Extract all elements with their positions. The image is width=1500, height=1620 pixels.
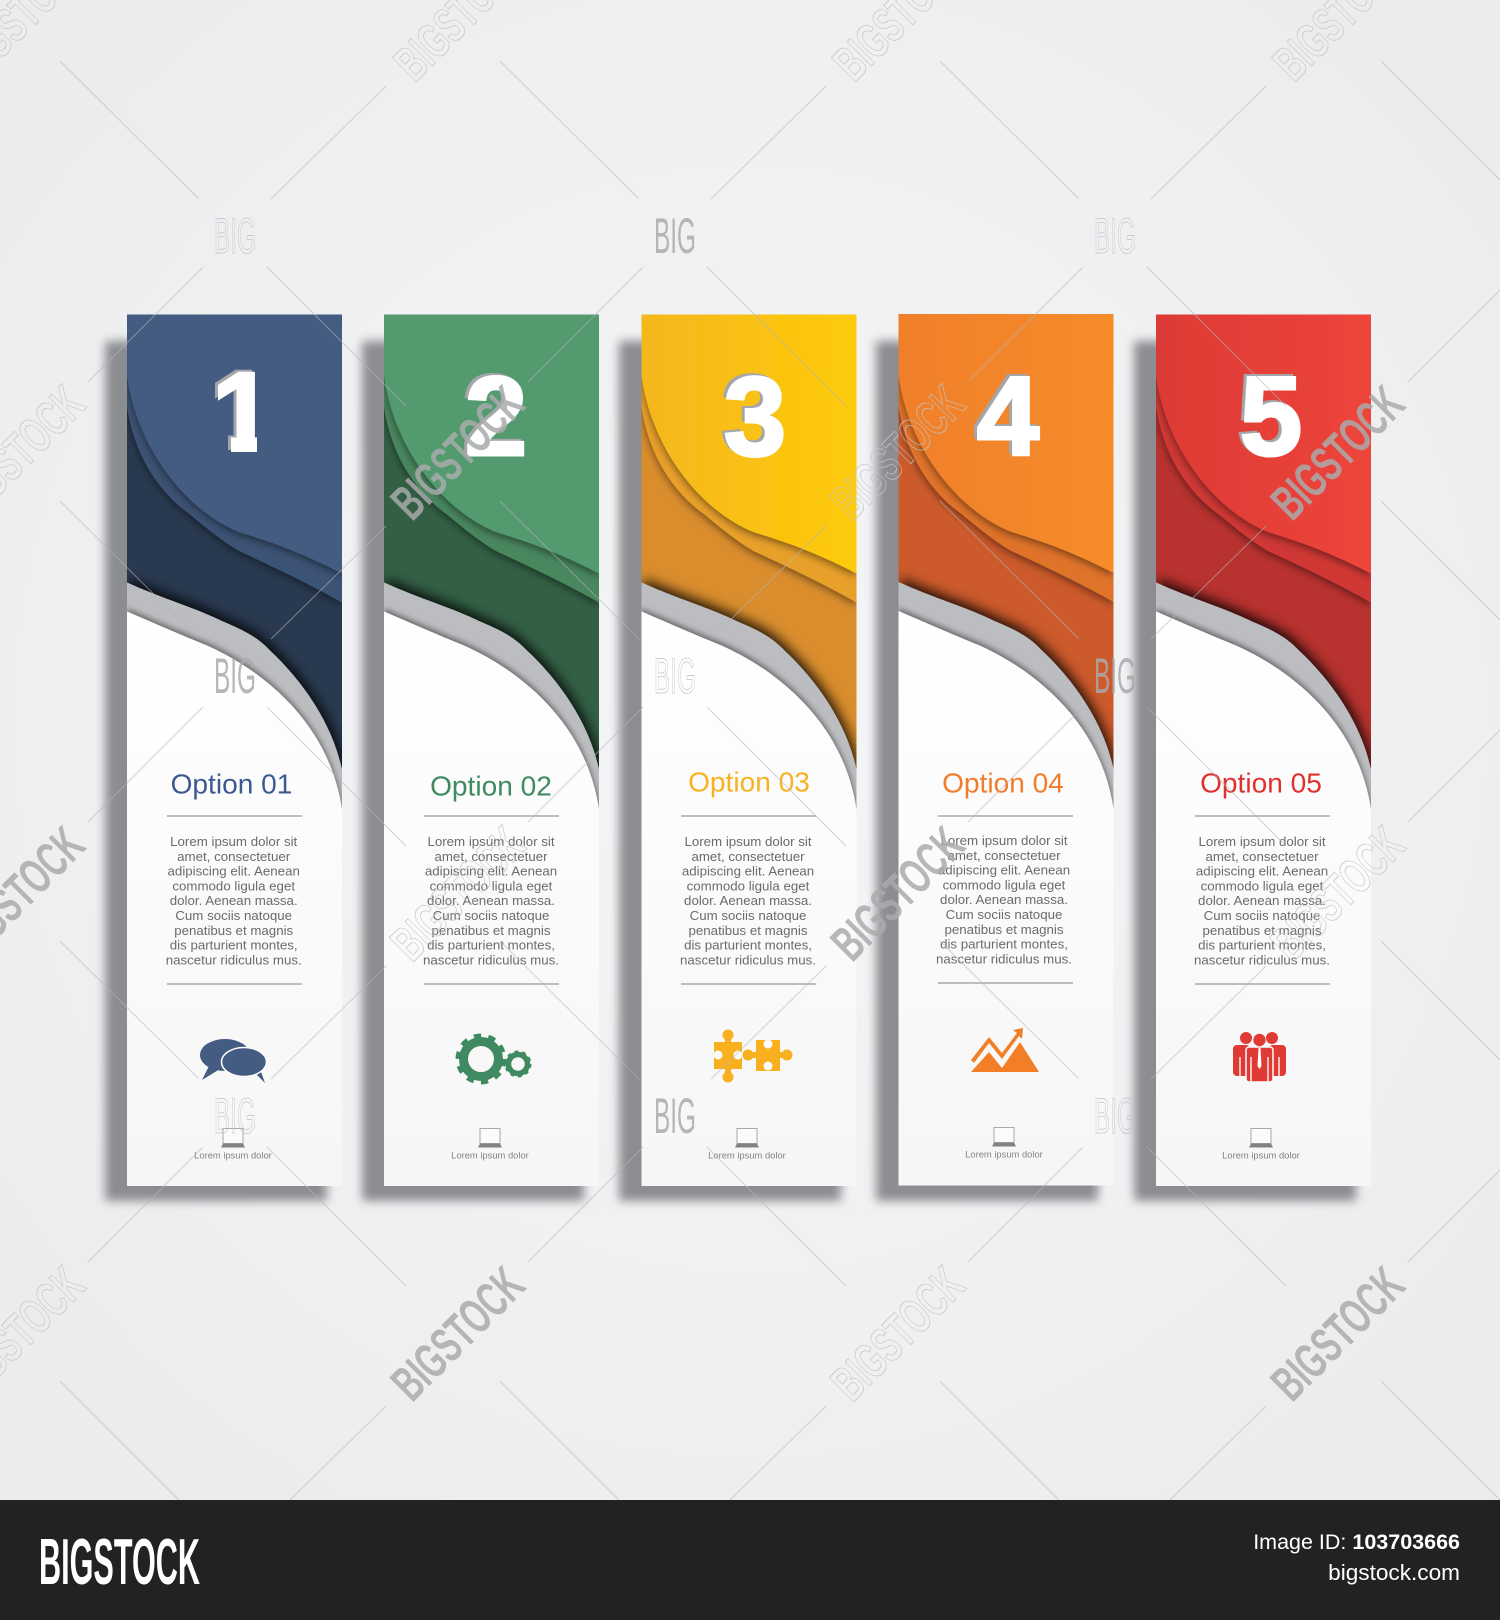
- text block 2: adipiscing elit. Aenean: [425, 864, 557, 879]
- icon: laptop: [1249, 1128, 1273, 1148]
- icon: team of people: [1233, 1032, 1286, 1082]
- watermark: BIG: BIG: [214, 208, 256, 264]
- icon: puzzle pieces: [714, 1030, 792, 1082]
- panel: option 5: [1156, 314, 1371, 1186]
- icon: laptop: [221, 1128, 245, 1148]
- text block 4: Lorem ipsum dolor sit: [940, 833, 1068, 848]
- text block 2: commodo ligula eget: [430, 878, 553, 893]
- card layers 1: [127, 314, 342, 1186]
- card layers 5: [1156, 314, 1371, 1186]
- card layers 2: [384, 314, 599, 1186]
- text block 5: penatibus et magnis: [1202, 923, 1322, 938]
- divider bottom: [167, 983, 302, 985]
- watermark: BIG: BIG: [654, 208, 696, 264]
- icon: gears: [458, 1036, 530, 1082]
- heading: Option 03: Option 03: [688, 766, 810, 798]
- divider bottom: [938, 982, 1073, 984]
- text block 4: dis parturient montes,: [940, 937, 1068, 952]
- text block 4: commodo ligula eget: [943, 877, 1066, 892]
- text block 5: adipiscing elit. Aenean: [1196, 864, 1328, 879]
- text block 1: dolor. Aenean massa.: [170, 893, 298, 908]
- watermark: BIGSTOCK: BIGSTOCK: [380, 1256, 535, 1411]
- divider top: [424, 815, 559, 817]
- text block 1: commodo ligula eget: [172, 878, 295, 893]
- text block 5: commodo ligula eget: [1201, 878, 1324, 893]
- number 2: 2: [465, 354, 527, 479]
- text block 3: Cum sociis natoque: [690, 908, 806, 923]
- panel shadows: [105, 341, 1356, 1201]
- text block 5: amet, consectetuer: [1205, 849, 1319, 864]
- text block 4: nascetur ridiculus mus.: [936, 951, 1072, 966]
- text block 5: Cum sociis natoque: [1204, 908, 1320, 923]
- divider top: [1195, 815, 1330, 817]
- divider bottom: [681, 983, 816, 985]
- heading: Option 04: Option 04: [942, 768, 1064, 798]
- heading: Option 01: Option 01: [171, 768, 292, 800]
- footer url: bigstock.com: [1328, 1560, 1460, 1585]
- text block 4: penatibus et magnis: [944, 922, 1064, 937]
- card layers 3: [642, 314, 856, 1186]
- text block 2: dis parturient montes,: [427, 938, 555, 953]
- heading: Option 02: Option 02: [430, 770, 552, 802]
- watermark: BIGSTOCK: BIGSTOCK: [380, 375, 535, 530]
- footer bar: [0, 1500, 1500, 1620]
- watermark: BIGSTOCK: BIGSTOCK: [820, 816, 975, 971]
- watermark: BIG: BIG: [654, 1088, 696, 1144]
- text block 5: Lorem ipsum dolor sit: [1198, 834, 1326, 849]
- text block 3: dolor. Aenean massa.: [684, 893, 812, 908]
- watermark: BIG: BIG: [654, 648, 696, 704]
- text block 1: Lorem ipsum dolor sit: [170, 834, 298, 849]
- text block 1: penatibus et magnis: [174, 923, 294, 938]
- text block 5: dolor. Aenean massa.: [1198, 893, 1326, 908]
- watermark: BIG: [214, 208, 1136, 1144]
- text block 3: penatibus et magnis: [688, 923, 808, 938]
- watermark: BIGSTOCK: BIGSTOCK: [1260, 1256, 1415, 1411]
- caption 1: Lorem ipsum dolor: [194, 1150, 272, 1160]
- text block 3: nascetur ridiculus mus.: [680, 952, 816, 967]
- number 3: 3: [724, 354, 786, 479]
- text block 1: nascetur ridiculus mus.: [166, 952, 302, 967]
- text block 4: adipiscing elit. Aenean: [938, 863, 1070, 878]
- heading: Option 05: Option 05: [1200, 768, 1322, 798]
- caption 4: Lorem ipsum dolor: [965, 1148, 1043, 1160]
- text block 1: amet, consectetuer: [177, 849, 291, 864]
- divider top: [938, 815, 1073, 817]
- icon: speech bubbles: [200, 1039, 266, 1083]
- caption 5: Lorem ipsum dolor: [1222, 1150, 1300, 1160]
- text block 1: Cum sociis natoque: [175, 908, 292, 923]
- text block 1: adipiscing elit. Aenean: [168, 864, 300, 879]
- divider top: [167, 815, 302, 817]
- watermark: BIGSTOCK: BIGSTOCK: [1260, 375, 1415, 530]
- divider top: [681, 815, 816, 817]
- text: BIG: [1094, 648, 1136, 704]
- panel: option 4: [898, 314, 1114, 1186]
- text: BIG: [1094, 208, 1136, 264]
- icon: laptop: [478, 1128, 502, 1148]
- text block 3: adipiscing elit. Aenean: [682, 864, 814, 879]
- panel: option 2: [384, 314, 599, 1186]
- watermark: BIGSTOCK: BIGSTOCK: [820, 1256, 975, 1411]
- text block 2: amet, consectetuer: [434, 849, 548, 864]
- text block 3: amet, consectetuer: [691, 849, 805, 864]
- watermark: BIGSTOCK: BIGSTOCK: [380, 816, 535, 971]
- text block 4: Cum sociis natoque: [946, 907, 1062, 922]
- text block 2: penatibus et magnis: [431, 923, 551, 938]
- caption 2: Lorem ipsum dolor: [451, 1150, 529, 1160]
- watermark: BIG: BIG: [214, 648, 256, 704]
- watermark: BIGSTOCK: BIGSTOCK: [820, 375, 975, 530]
- caption 3: Lorem ipsum dolor: [708, 1150, 786, 1160]
- panel: option 3: [642, 314, 856, 1186]
- text block 2: Lorem ipsum dolor sit: [427, 834, 555, 849]
- text block 4: amet, consectetuer: [947, 848, 1061, 863]
- icon: laptop: [992, 1128, 1016, 1146]
- divider bottom: [1195, 983, 1330, 985]
- text block 3: commodo ligula eget: [687, 878, 810, 893]
- text: BIG: [1094, 1088, 1136, 1144]
- number 4: 4: [977, 354, 1039, 479]
- number 1: 1: [212, 350, 274, 474]
- icon: laptop: [735, 1128, 759, 1148]
- watermark: BIGSTOCK: BIGSTOCK: [1260, 816, 1415, 971]
- text block 4: dolor. Aenean massa.: [940, 892, 1068, 907]
- text block 5: dis parturient montes,: [1198, 938, 1326, 953]
- text block 2: nascetur ridiculus mus.: [423, 952, 559, 967]
- text block 1: dis parturient montes,: [170, 938, 298, 953]
- icon: rising chart: [971, 1028, 1039, 1072]
- number 5: 5: [1240, 354, 1302, 479]
- card layers 4: [898, 314, 1114, 1186]
- image id: Image ID: 103703666: [1253, 1530, 1460, 1554]
- watermark: BIG: BIG: [214, 1088, 256, 1144]
- divider bottom: [424, 983, 559, 985]
- text block 2: dolor. Aenean massa.: [427, 893, 555, 908]
- footer bar: BIGSTOCK: [39, 1525, 200, 1598]
- text block 3: Lorem ipsum dolor sit: [684, 834, 812, 849]
- text block 5: nascetur ridiculus mus.: [1194, 952, 1330, 967]
- text block 2: Cum sociis natoque: [433, 908, 549, 923]
- text block 3: dis parturient montes,: [684, 938, 812, 953]
- panel: option 1: [127, 314, 342, 1186]
